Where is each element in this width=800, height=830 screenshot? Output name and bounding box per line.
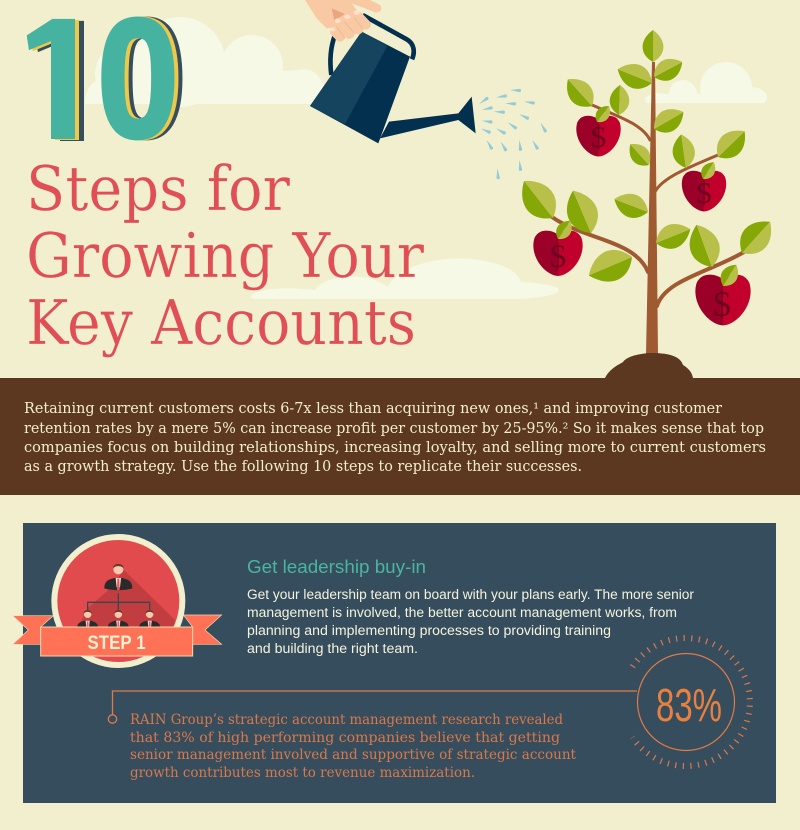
step description: and building the right team. — [247, 641, 418, 656]
apple 2: $ — [696, 175, 712, 210]
apple 3 — [533, 217, 583, 276]
intro text: Retaining current customers costs 6-7x less than acquiring new ones,¹ and improving customer — [24, 401, 722, 417]
apple 4 — [695, 260, 751, 325]
badge circle — [51, 534, 185, 668]
can body — [310, 32, 410, 143]
title — [26, 152, 424, 359]
title line 2: Growing Your — [26, 219, 424, 292]
step description: planning and implementing processes to providing training — [247, 623, 611, 638]
soil mound — [605, 353, 693, 378]
step description: management is involved, the better account management works, from — [247, 605, 677, 620]
intro text: retention rates by a mere 5% can increase profit per customer by 25-95%.² So it makes sense that top — [24, 421, 764, 437]
numeral 1: 1 — [6, 0, 114, 213]
water drops — [478, 88, 547, 179]
callout text: RAIN Group’s strategic account management research revealed — [130, 712, 563, 728]
title line 3: Key Accounts — [26, 286, 416, 359]
apple 1 — [576, 102, 621, 156]
team members — [77, 610, 160, 630]
step heading: Get leadership buy-in — [247, 556, 426, 577]
title line 1: Steps for — [26, 152, 290, 225]
panel: intro band — [0, 378, 800, 495]
apple 2 — [682, 159, 726, 212]
ribbon band — [41, 627, 193, 656]
intro text — [24, 401, 766, 475]
can body highlight — [310, 32, 387, 124]
callout text: growth contributes most to revenue maximization. — [130, 765, 475, 781]
cloud: behind title — [251, 258, 559, 299]
can spout — [380, 97, 476, 138]
icon: hand holding watering can — [305, 0, 476, 143]
stat: 83%: 83% — [656, 679, 722, 731]
leaves — [512, 30, 780, 289]
can handle — [330, 15, 414, 75]
callout text — [130, 712, 576, 781]
org chart lines — [88, 593, 150, 611]
apple 3: $ — [550, 239, 566, 275]
callout text: senior management involved and supportive of strategic account — [130, 747, 576, 763]
cloud: behind numeral — [85, 17, 327, 107]
step description: Get your leadership team on board with your plans early. The more senior — [247, 587, 695, 602]
apple 1: $ — [591, 119, 606, 154]
callout text: that 83% of high performing companies believe that getting — [130, 730, 560, 746]
numeral 1: 1 — [11, 0, 119, 214]
cloud: upper right — [645, 62, 767, 103]
intro text: companies focus on building relationships, increasing loyalty, and selling more to current customers — [24, 440, 766, 456]
trunk — [646, 62, 658, 354]
stat: 83% — [632, 638, 750, 766]
numeral 10 — [26, 16, 182, 141]
icon: money tree — [512, 30, 780, 378]
numeral 1: 1 — [2, 0, 110, 212]
step description — [247, 587, 695, 656]
ribbon tails — [13, 615, 222, 644]
branches — [552, 105, 744, 306]
apple 4: $ — [713, 284, 731, 324]
connector line — [108, 691, 637, 723]
panel: step 1 — [13, 523, 776, 803]
top executive — [104, 564, 132, 590]
step label: STEP 1 — [88, 633, 146, 654]
hand — [305, 0, 381, 38]
numeral 1 — [26, 18, 84, 141]
step 1 badge — [13, 534, 222, 668]
intro text: as a growth strategy. Use the following 10 steps to replicate their successes. — [24, 459, 582, 475]
